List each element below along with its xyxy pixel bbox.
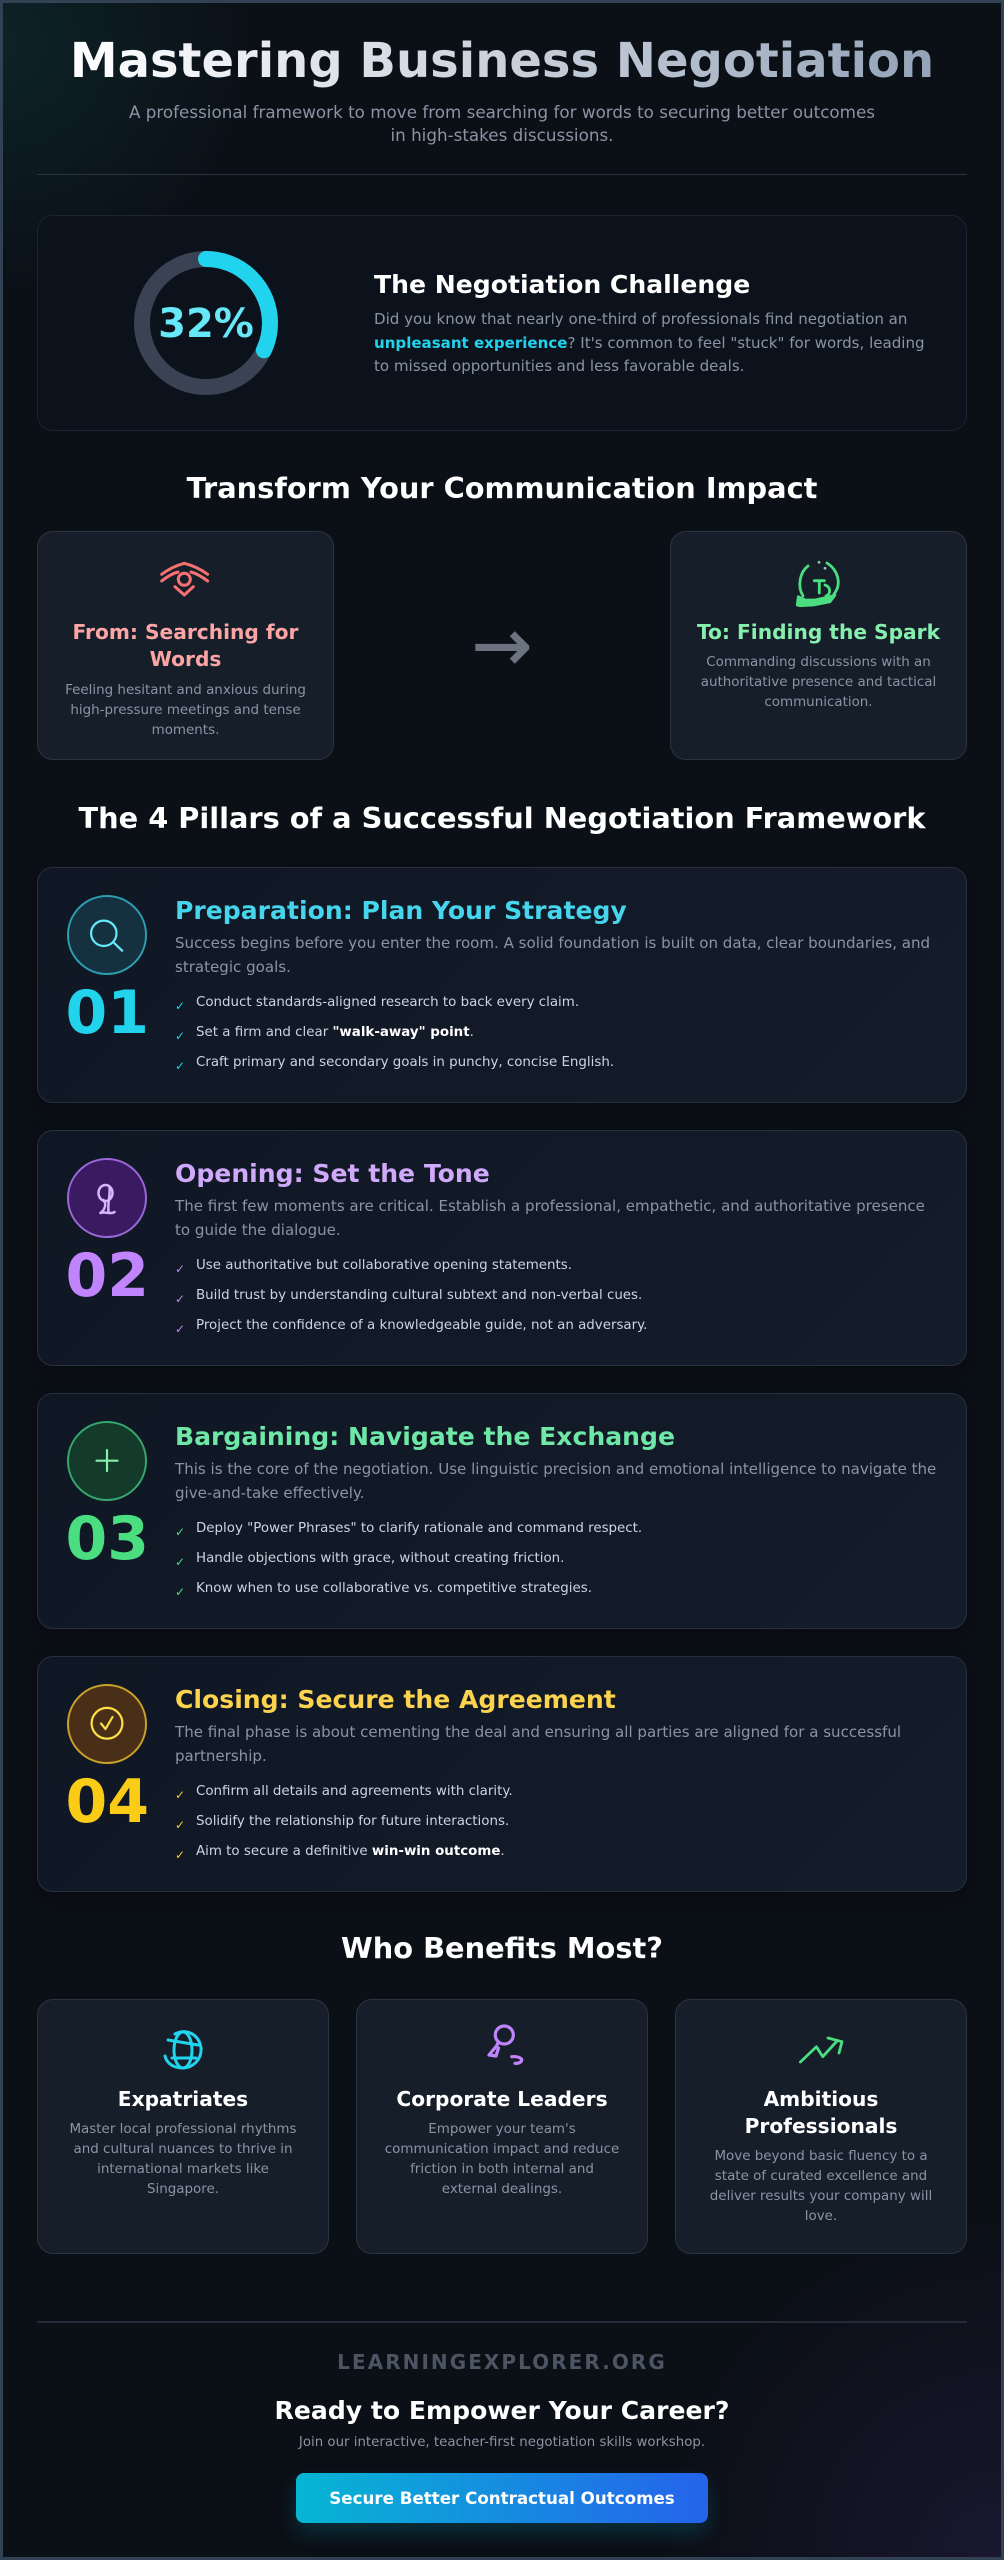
- pillar 1 description: strategic goals.: [175, 958, 291, 976]
- corporate leaders heading: Corporate Leaders: [396, 2087, 608, 2111]
- to description: Commanding discussions with an: [706, 655, 931, 670]
- pillar 2 bullet 3: ✓: [175, 1322, 185, 1336]
- title: Mastering Business Negotiation: [70, 33, 934, 89]
- subtitle: [129, 102, 875, 145]
- ambitious professionals description: [710, 2149, 932, 2224]
- expatriates description: and cultural nuances to thrive in: [74, 2142, 292, 2157]
- panel: from searching for words: [37, 531, 334, 760]
- challenge text: to missed opportunities and less favorable deals.: [374, 357, 744, 375]
- panel: pillar 2 opening: [37, 1130, 967, 1366]
- to description: communication.: [764, 695, 873, 710]
- expatriates description: Master local professional rhythms: [69, 2122, 297, 2137]
- pillar 4 description: partnership.: [175, 1747, 267, 1765]
- pillar 3 bullet 2: ✓: [175, 1555, 185, 1569]
- number 02: 02: [66, 1241, 149, 1311]
- pillar 2 description: to guide the dialogue.: [175, 1221, 341, 1239]
- chart: 32% progress ring: [134, 251, 278, 395]
- pillar 4 heading: Closing: Secure the Agreement: [175, 1685, 616, 1714]
- challenge text: [374, 310, 925, 375]
- icon: magnifier: [66, 895, 146, 975]
- challenge heading: The Negotiation Challenge: [374, 270, 750, 299]
- ambitious professionals description: Move beyond basic fluency to a: [714, 2149, 928, 2164]
- pillar 3 description: [174, 1460, 936, 1502]
- expatriates description: Singapore.: [147, 2182, 219, 2197]
- pillar 2 description: [174, 1197, 925, 1239]
- pillar 3 bullet 3: Know when to use collaborative vs. competitive strategies.: [196, 1581, 592, 1596]
- panel: pillar 1 preparation: [37, 867, 967, 1103]
- from description: moments.: [152, 723, 219, 738]
- from description: [65, 683, 306, 738]
- heading: transform: Transform Your Communication Impact: [187, 471, 817, 505]
- pillar 4 bullet 3: Aim to secure a definitive win-win outcome.: [196, 1844, 505, 1859]
- challenge text: unpleasant experience? It's common to feel "stuck" for words, leading: [374, 334, 925, 352]
- pillar 1 description: [175, 934, 930, 976]
- brand name: LEARNINGEXPLORER.ORG: [337, 2350, 667, 2374]
- icon: leader figure: [487, 2024, 524, 2065]
- call to action heading: Ready to Empower Your Career?: [275, 2396, 729, 2425]
- number 01: 01: [66, 978, 149, 1048]
- pillar 4 description: The final phase is about cementing the deal and ensuring all parties are aligned for a successful: [175, 1723, 901, 1741]
- panel: pillar 4 closing: [37, 1656, 967, 1892]
- pillar 2 heading: Opening: Set the Tone: [175, 1159, 490, 1188]
- pillar 4 bullet 1: ✓: [175, 1788, 185, 1802]
- expatriates description: [69, 2122, 297, 2197]
- icon: spark in hand: [796, 560, 840, 608]
- pillar 4 bullet 1: Confirm all details and agreements with clarity.: [196, 1784, 513, 1799]
- ambitious professionals heading: [745, 2087, 897, 2138]
- corporate leaders description: external dealings.: [442, 2182, 562, 2197]
- icon: speaker glyph: [66, 1158, 146, 1238]
- icon: rising chart: [798, 2036, 844, 2064]
- pillar 2 bullet 3: Project the confidence of a knowledgeable guide, not an adversary.: [196, 1318, 647, 1333]
- pillar 3 description: This is the core of the negotiation. Use linguistic precision and emotional intelligence to navigate the: [175, 1460, 936, 1478]
- button: Secure Better Contractual Outcomes: [329, 2488, 675, 2508]
- call to action text: Join our interactive, teacher-first negotiation skills workshop.: [299, 2435, 705, 2450]
- subtitle: in high-stakes discussions.: [390, 125, 614, 145]
- panel: ambitious professionals: [675, 1999, 967, 2254]
- pillar 1 bullet 1: ✓: [175, 999, 185, 1013]
- pillar 3 description: give-and-take effectively.: [175, 1484, 365, 1502]
- corporate leaders description: [385, 2122, 619, 2197]
- pillar 2 bullet 2: ✓: [175, 1292, 185, 1306]
- panel: the negotiation challenge: [37, 215, 967, 431]
- panel: corporate leaders: [356, 1999, 648, 2254]
- corporate leaders description: friction in both internal and: [410, 2162, 594, 2177]
- corporate leaders description: Empower your team's: [428, 2122, 576, 2137]
- pillar 2 bullet 2: Build trust by understanding cultural subtext and non-verbal cues.: [196, 1288, 642, 1303]
- icon: plus: [66, 1421, 146, 1501]
- ambitious professionals description: deliver results your company will: [710, 2189, 932, 2204]
- pillar 2 bullet 1: Use authoritative but collaborative opening statements.: [196, 1258, 572, 1273]
- icon: globe: [164, 2030, 203, 2070]
- pillar 4 bullet 3: ✓: [175, 1848, 185, 1862]
- arrow: →: [472, 603, 532, 687]
- pillar 1 bullet 2: Set a firm and clear "walk-away" point.: [196, 1025, 474, 1040]
- to description: [701, 655, 936, 710]
- pillar 3 heading: Bargaining: Navigate the Exchange: [175, 1422, 675, 1451]
- pillar 1 bullet 3: ✓: [175, 1059, 185, 1073]
- heading: who benefits: Who Benefits Most?: [341, 1931, 663, 1965]
- pillar 1 description: Success begins before you enter the room. A solid foundation is built on data, clear boundaries, and: [175, 934, 930, 952]
- panel: pillar 3 bargaining: [37, 1393, 967, 1629]
- heading: 4 pillars: The 4 Pillars of a Successful Negotiation Framework: [78, 801, 925, 835]
- from heading: From: Searching for: [72, 620, 298, 644]
- pillar 1 bullet 2: ✓: [175, 1029, 185, 1043]
- number 03: 03: [66, 1504, 149, 1574]
- pillar 4 description: [174, 1723, 901, 1765]
- pillar 3 bullet 2: Handle objections with grace, without creating friction.: [196, 1551, 564, 1566]
- pillar 3 bullet 3: ✓: [175, 1585, 185, 1599]
- from heading: Words: [150, 647, 221, 671]
- pillar 4 bullet 2: ✓: [175, 1818, 185, 1832]
- panel: expatriates: [37, 1999, 329, 2254]
- expatriates heading: Expatriates: [118, 2087, 248, 2111]
- button: [296, 2473, 708, 2523]
- challenge text: Did you know that nearly one-third of professionals find negotiation an: [374, 310, 907, 328]
- icon: circled check: [66, 1684, 146, 1764]
- pillar 2 description: The first few moments are critical. Establish a professional, empathetic, and authoritative presence: [175, 1197, 925, 1215]
- panel: to finding the spark: [670, 531, 967, 760]
- to heading: To: Finding the Spark: [697, 620, 940, 644]
- corporate leaders description: communication impact and reduce: [385, 2142, 619, 2157]
- pillar 1 bullet 3: Craft primary and secondary goals in punchy, concise English.: [196, 1055, 614, 1070]
- chart: 32% progress ring: 32%: [158, 301, 254, 347]
- ambitious professionals heading: Professionals: [745, 2114, 897, 2138]
- subtitle: A professional framework to move from searching for words to securing better outcomes: [129, 102, 875, 122]
- pillar 3 bullet 1: Deploy "Power Phrases" to clarify rationale and command respect.: [196, 1521, 642, 1536]
- from description: Feeling hesitant and anxious during: [65, 683, 306, 698]
- ambitious professionals heading: Ambitious: [764, 2087, 878, 2111]
- number 04: 04: [66, 1767, 149, 1837]
- from description: high-pressure meetings and tense: [70, 703, 301, 718]
- ambitious professionals description: love.: [805, 2209, 837, 2224]
- expatriates description: international markets like: [97, 2162, 269, 2177]
- to description: authoritative presence and tactical: [701, 675, 936, 690]
- ambitious professionals description: state of curated excellence and: [715, 2169, 927, 2184]
- pillar 4 bullet 2: Solidify the relationship for future interactions.: [196, 1814, 509, 1829]
- from heading: [72, 620, 298, 671]
- pillar 3 bullet 1: ✓: [175, 1525, 185, 1539]
- pillar 2 bullet 1: ✓: [175, 1262, 185, 1276]
- pillar 1 heading: Preparation: Plan Your Strategy: [175, 896, 627, 925]
- pillar 1 bullet 1: Conduct standards-aligned research to back every claim.: [196, 995, 579, 1010]
- icon: winged eye: [160, 562, 210, 597]
